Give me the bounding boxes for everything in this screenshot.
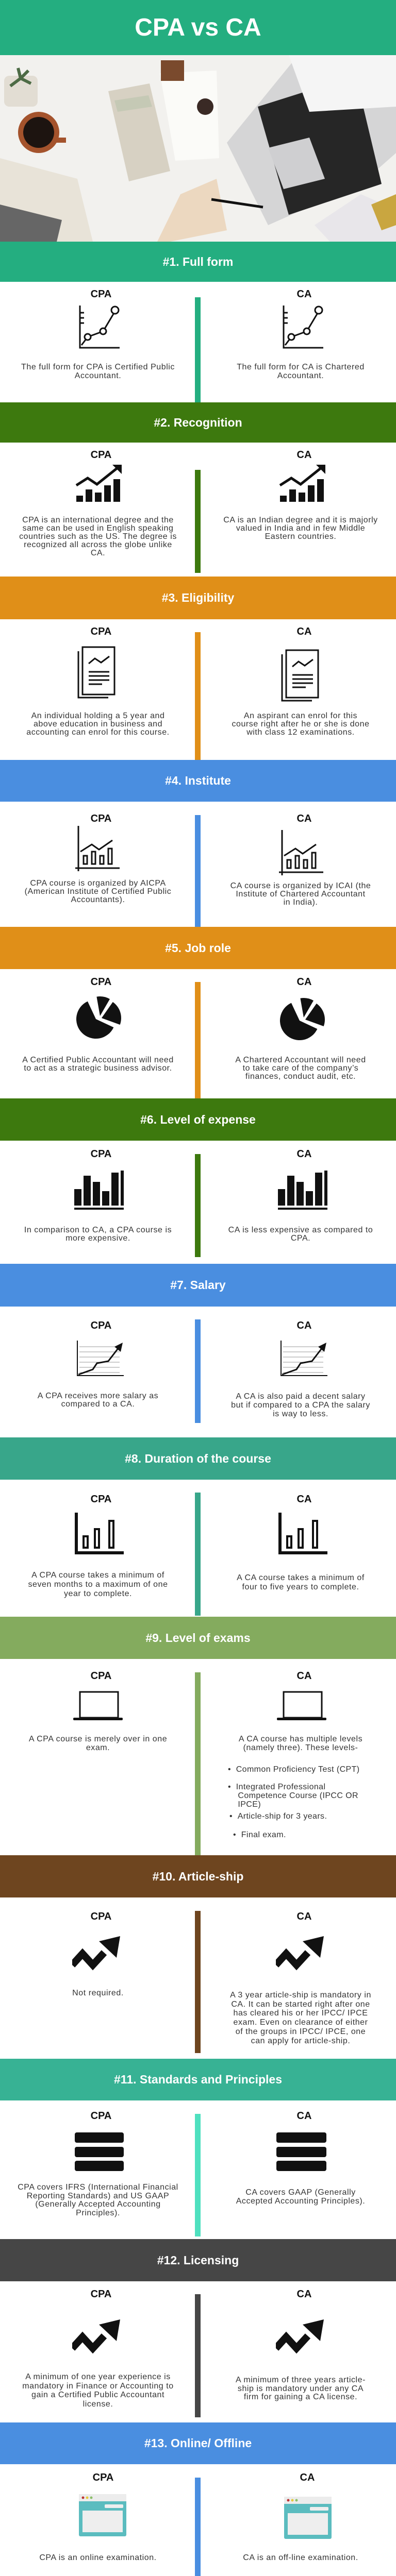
s10 CA text: has cleared his or her IPCC/ IPCE	[234, 2009, 368, 2018]
s9 CA bullet list: • Article-ship for 3 years.	[229, 1812, 327, 1821]
s9 CPA text: exam.	[86, 1743, 110, 1752]
s7 CPA label: CPA	[91, 1320, 111, 1331]
s13 CPA text: CPA is an online examination.	[39, 2553, 157, 2562]
s12 CA text: firm for gaining a CA license.	[244, 2393, 357, 2401]
s7 CA label: CA	[297, 1320, 311, 1331]
section 1 divider	[195, 297, 201, 402]
section 6 header: #6. Level of expense	[140, 1113, 256, 1126]
s3 CA label: CA	[297, 626, 311, 637]
section 13 header	[0, 2422, 396, 2464]
s12 CA text: ship is mandatory under any CA	[238, 2384, 364, 2393]
s5 CPA text	[22, 1056, 174, 1073]
s4 CPA text	[25, 879, 171, 904]
s7 CA text: but if compared to a CPA the salary	[231, 1401, 370, 1410]
s7 CPA text: A CPA receives more salary as	[38, 1392, 158, 1400]
s9 CA bullet list: • Final exam.	[233, 1831, 286, 1839]
s6 CA text	[228, 1226, 373, 1243]
s9 CA bullet list: IPCE)	[238, 1800, 261, 1809]
s3 CPA text: accounting can enrol for this course.	[26, 728, 170, 737]
s11 CA label: CA	[297, 2110, 311, 2122]
s3 CPA text	[26, 711, 170, 737]
section 2 header	[0, 402, 396, 443]
s10 CPA text: Not required.	[72, 1989, 124, 1997]
s11 CPA text: CPA covers IFRS (International Financial	[18, 2183, 178, 2192]
section 12 header	[0, 2239, 396, 2281]
s12 divider	[195, 2294, 201, 2417]
s4 CA text	[230, 882, 371, 907]
s4 CA text: in India).	[284, 898, 318, 907]
s12 CA text: A minimum of three years article-	[236, 2376, 366, 2384]
s4 CPA text: (American Institute of Certified Public	[25, 887, 171, 896]
s9 CA bullet list	[228, 1765, 360, 1839]
s2 divider	[195, 470, 201, 573]
s8 CPA text	[28, 1571, 168, 1598]
icon: axis bar outline chart CPA	[75, 826, 120, 871]
s5 CPA text: to act as a strategic business advisor.	[24, 1064, 172, 1073]
s7 CPA text	[37, 1392, 158, 1409]
s11 CPA text	[0, 2183, 196, 2217]
s3 CA text	[232, 711, 370, 737]
s2 CA label: CA	[297, 449, 311, 461]
icon: growth graph CA	[280, 1341, 327, 1376]
section 9 header	[0, 1617, 396, 1659]
section 9 header: #9. Level of exams	[145, 1631, 251, 1645]
s10 CA label: CA	[297, 1911, 311, 1922]
s10 CA text: A 3 year article-ship is mandatory in	[230, 1991, 371, 1999]
s12 CPA text: license.	[83, 2400, 113, 2409]
s10 CA text	[206, 1991, 395, 2045]
s5 CPA label: CPA	[91, 976, 111, 988]
icon: stacked bars CPA	[72, 2132, 124, 2172]
s11 CA text: CA covers GAAP (Generally	[245, 2188, 356, 2197]
section 11 header: #11. Standards and Principles	[114, 2073, 282, 2086]
s3 CPA text: An individual holding a 5 year and	[31, 711, 164, 720]
s9 CA text: (namely three). These levels-	[243, 1743, 358, 1752]
s2 CA text: Eastern countries.	[265, 532, 336, 541]
s4 CPA text: CPA course is organized by AICPA	[30, 879, 166, 888]
s6 CA text: CPA.	[291, 1234, 310, 1243]
s9 CA text: A CA course has multiple levels	[239, 1735, 362, 1743]
s8 CPA text: seven months to a maximum of one	[28, 1580, 168, 1589]
s1 CA text	[237, 363, 365, 380]
icon: bar chart CA	[278, 1171, 327, 1210]
s12 CPA text: A minimum of one year experience is	[25, 2372, 171, 2381]
s7 CA text	[231, 1392, 370, 1418]
s2 CPA text: same can be used in English speaking	[23, 524, 173, 533]
section 10 header	[0, 1855, 396, 1897]
s5 CA text	[235, 1056, 366, 1081]
icon: bar chart CPA	[74, 1171, 124, 1210]
s7 CA text: is way to less.	[273, 1410, 328, 1418]
s9 CA bullet list: • Integrated Professional	[228, 1783, 325, 1791]
s8 CPA text: year to complete.	[64, 1589, 132, 1598]
icon: bars with trend CA	[279, 465, 325, 502]
s2 CA text: valued in India and in few Middle	[236, 524, 365, 533]
s7 CPA text: compared to a CA.	[61, 1400, 135, 1409]
s10 CA text: exam. Even on clearance of either	[234, 2018, 368, 2027]
s5 CA label: CA	[297, 976, 311, 988]
s4 CPA label: CPA	[91, 813, 111, 824]
s2 CPA label: CPA	[91, 449, 111, 461]
s13 CPA label: CPA	[93, 2472, 113, 2483]
s12 CPA text: gain a Certified Public Accountant	[31, 2391, 164, 2399]
s3 CA text: An aspirant can enrol for this	[244, 711, 357, 720]
s10 divider	[195, 1911, 201, 2053]
title: CPA vs CA	[135, 14, 261, 41]
section 4 header: #4. Institute	[165, 774, 231, 787]
section 2 header: #2. Recognition	[154, 415, 242, 429]
s6 CA text: CA is less expensive as compared to	[228, 1226, 373, 1234]
s2 CA text	[223, 516, 378, 541]
icon: bars with trend CPA	[75, 465, 122, 502]
icon: stacked bars CA	[276, 2132, 327, 2172]
s3 CA text: with class 12 examinations.	[246, 728, 355, 737]
s9 CA bullet list: • Common Proficiency Test (CPT)	[228, 1765, 360, 1774]
s1 CPA label: CPA	[91, 289, 111, 300]
s13 CA label: CA	[300, 2472, 315, 2483]
s3 CA text: course right after he or she is done	[232, 720, 370, 728]
icon: axis bar outline chart CA	[279, 830, 323, 875]
s8 divider	[195, 1493, 201, 1616]
s11 divider	[195, 2114, 201, 2236]
icon: browser window CPA	[79, 2494, 126, 2536]
s10 CA text: CA. It can be started right after one	[231, 2000, 370, 2009]
s2 CPA text: recognized all across the globe unlike	[24, 540, 172, 549]
s1 CPA text: The full form for CPA is Certified Public	[21, 363, 175, 371]
s9 CA label: CA	[297, 1670, 311, 1682]
icon: line chart circles CPA	[79, 306, 120, 348]
s9 CPA text	[29, 1735, 167, 1752]
section 3 header: #3. Eligibility	[162, 591, 234, 604]
s5 CA text: A Chartered Accountant will need	[235, 1056, 366, 1064]
s11 CA text	[206, 2189, 395, 2206]
s2 CPA text: CA.	[91, 549, 105, 557]
s3 divider	[195, 632, 201, 760]
title	[0, 0, 396, 55]
s11 CPA text: Principles).	[76, 2208, 120, 2217]
s9 divider	[195, 1672, 201, 1855]
s4 CA text: Institute of Chartered Accountant	[236, 890, 366, 899]
photo: desk with laptop and calculator	[0, 55, 396, 242]
section 6 header	[0, 1098, 396, 1141]
s8 CA text: A CA course takes a minimum of	[237, 1573, 365, 1582]
icon: laptop CPA	[73, 1691, 123, 1720]
section 13 header: #13. Online/ Offline	[144, 2436, 252, 2450]
section 7 header: #7. Salary	[170, 1278, 226, 1292]
s8 CA text	[237, 1573, 365, 1591]
s1 CA label: CA	[297, 289, 311, 300]
s10 CA text: can apply for article-ship.	[251, 2037, 350, 2045]
s9 CA text	[239, 1735, 362, 1752]
section 8 header: #8. Duration of the course	[125, 1452, 271, 1465]
s12 CA text	[206, 2376, 395, 2402]
s6 CPA text	[24, 1226, 172, 1243]
s10 CA text: of the groups in IPCC/ IPCE, one	[236, 2027, 366, 2036]
s11 CA text: Accepted Accounting Principles).	[236, 2197, 365, 2205]
icon: laptop CA	[277, 1691, 326, 1720]
s9 CPA text: A CPA course is merely over in one	[29, 1735, 167, 1743]
s2 CPA text: CPA is an international degree and the	[22, 516, 174, 524]
s6 divider	[195, 1154, 201, 1257]
s10 CPA label: CPA	[91, 1911, 111, 1922]
section 10 header: #10. Article-ship	[153, 1869, 243, 1883]
section 11 header	[0, 2059, 396, 2100]
s4 divider	[195, 815, 201, 927]
s6 CPA text: more expensive.	[65, 1234, 130, 1243]
s2 CPA text	[19, 516, 177, 557]
s11 CPA text: Reporting Standards) and US GAAP	[27, 2192, 169, 2200]
s9 CA bullet list: Competence Course (IPCC OR	[238, 1791, 358, 1800]
s1 CPA text: Accountant.	[75, 371, 121, 380]
s8 CA text: four to five years to complete.	[242, 1583, 359, 1591]
icon: browser window CA	[284, 2497, 332, 2539]
s7 CA text: A CA is also paid a decent salary	[236, 1392, 366, 1401]
section 8 header	[0, 1437, 396, 1480]
icon: bar outline chart CA	[278, 1513, 327, 1554]
s1 CA text: The full form for CA is Chartered	[237, 363, 365, 371]
icon: line chart circles CA	[283, 306, 323, 348]
section 1 header: #1. Full form	[163, 255, 233, 268]
s11 CPA text: (Generally Accepted Accounting	[35, 2200, 161, 2209]
s5 CA text: finances, conduct audit, etc.	[245, 1072, 356, 1081]
s1 CA text: Accountant.	[277, 371, 324, 380]
s2 CPA text: countries such as the US. The degree is	[19, 532, 177, 541]
s5 divider	[195, 982, 201, 1098]
s4 CA text: CA course is organized by ICAI (the	[230, 882, 371, 890]
s6 CPA text: In comparison to CA, a CPA course is	[24, 1226, 172, 1234]
section 5 header	[0, 927, 396, 969]
icon: zigzag arrow licensing CPA	[72, 2318, 124, 2354]
s12 CPA text: mandatory in Finance or Accounting to	[22, 2382, 174, 2391]
icon: pie chart CPA	[76, 996, 121, 1039]
section 5 header: #5. Job role	[165, 941, 231, 954]
s6 CPA label: CPA	[91, 1148, 111, 1160]
s8 CPA text: A CPA course takes a minimum of	[31, 1571, 164, 1580]
s3 CPA text: above education in business and	[34, 720, 162, 728]
section 4 header	[0, 760, 396, 802]
s12 CPA text	[0, 2372, 196, 2409]
icon: report document CPA	[77, 646, 116, 699]
s11 CPA label: CPA	[91, 2110, 111, 2122]
s7 divider	[195, 1319, 201, 1423]
icon: report document CA	[282, 649, 319, 702]
s5 CA text: to take care of the company’s	[243, 1064, 358, 1073]
s12 CPA label: CPA	[91, 2289, 111, 2300]
s6 CA label: CA	[297, 1148, 311, 1160]
s4 CA label: CA	[297, 813, 311, 824]
icon: growth graph CPA	[77, 1341, 124, 1376]
s3 CPA label: CPA	[91, 626, 111, 637]
s13 CA text: CA is an off-line examination.	[243, 2553, 358, 2562]
icon: zigzag arrow CA	[276, 1936, 324, 1970]
section 7 header	[0, 1264, 396, 1307]
s4 CPA text: Accountants).	[71, 895, 125, 904]
icon: bar outline chart CPA	[75, 1513, 124, 1554]
icon: pie chart CA	[279, 998, 325, 1040]
s13 divider	[195, 2478, 201, 2576]
s2 CA text: CA is an Indian degree and it is majorly	[223, 516, 378, 524]
s8 CA label: CA	[297, 1494, 311, 1505]
section 1 header	[0, 242, 396, 282]
s5 CPA text: A Certified Public Accountant will need	[22, 1056, 174, 1064]
s1 CPA text	[21, 363, 175, 380]
icon: zigzag arrow licensing CA	[276, 2318, 327, 2354]
s12 CA label: CA	[297, 2289, 311, 2300]
s9 CPA label: CPA	[91, 1670, 111, 1682]
s8 CPA label: CPA	[91, 1494, 111, 1505]
section 12 header: #12. Licensing	[157, 2253, 239, 2267]
section 3 header	[0, 577, 396, 619]
icon: zigzag arrow CPA	[72, 1936, 120, 1970]
